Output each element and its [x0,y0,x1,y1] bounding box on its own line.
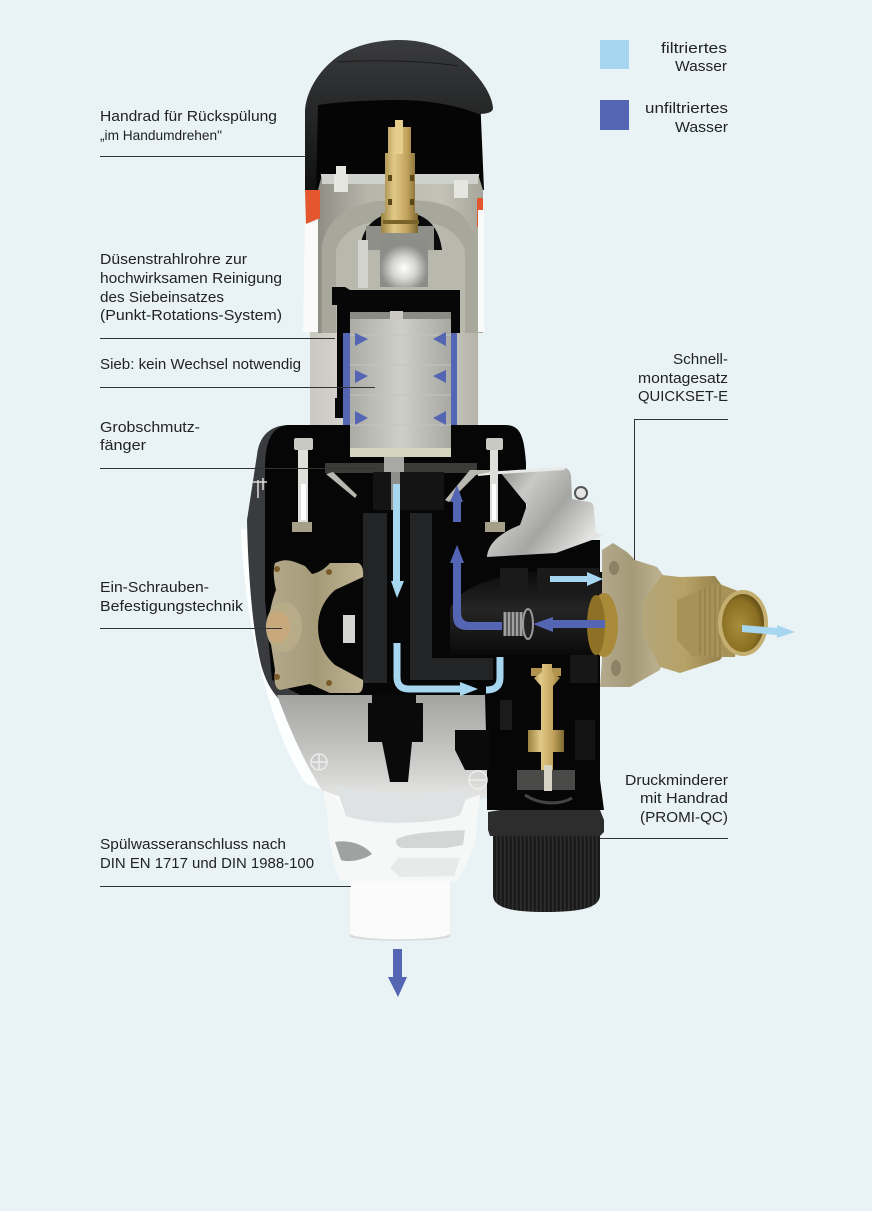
label: one-screw mounting: Ein-Schrauben- [100,579,209,596]
label: quick mounting set: montagesatz [638,370,728,387]
brass cartridge [381,120,419,233]
label: sieve: Sieb: kein Wechsel notwendig [100,356,301,373]
inner dark channels [363,513,604,760]
legend: filtered water label: Wasser [675,58,727,75]
label: quick mounting set: Schnell- [673,351,728,368]
filter device cutaway [241,40,795,997]
label: nozzle jet pipes [100,251,335,338]
pressure reducer nut [488,810,604,836]
unfiltered water flow arrows [450,485,605,632]
label: nozzle jet pipes: des Siebeinsatzes [100,289,224,306]
logo mark on shell [252,478,267,498]
left brass flange [266,560,363,693]
label: pressure reducer: Druckminderer [625,772,728,789]
pressure reducer knob [493,836,600,912]
label: flush water connection: DIN EN 1717 und DIN 1988-100 [100,855,314,872]
label: handwheel: Handrad für Rückspülung [100,108,277,125]
legend [600,40,728,136]
upper grey housing [318,174,483,333]
dome seam [338,61,458,66]
white side bands [303,210,484,332]
sieve insert [350,311,451,457]
orange side markers [305,190,483,227]
label: handwheel [100,108,305,156]
label: coarse dirt trap: fänger [100,437,146,454]
inner sieve collar [325,457,500,510]
legend: filtered water swatch [600,40,629,69]
legend: unfiltered water label [645,100,728,136]
legend: unfiltered water label: unfiltriertes [645,100,728,117]
grey lower chamber [277,695,490,800]
unfiltered water bars and inward arrows [343,332,457,425]
label: coarse dirt trap: Grobschmutz- [100,419,200,436]
label: pressure reducer: mit Handrad [640,790,728,807]
handwheel dome cap [305,40,493,190]
upper small screws [334,166,468,198]
lower brass pressure valve stem [517,664,575,803]
label: nozzle jet pipes: (Punkt-Rotations-System) [100,307,282,324]
black filter cage [332,287,460,418]
mounting screws [292,438,505,532]
label: flush water connection: Spülwasseranschluss nach [100,836,286,853]
white screw in chamber [311,754,327,770]
label: coarse dirt trap [100,419,377,468]
legend: filtered water label: filtriertes [661,40,727,57]
silver housing right [478,467,603,557]
label: quick mounting set [634,351,728,560]
filtered water flow arrows [391,484,795,696]
label: nozzle jet pipes: hochwirksamen Reinigung [100,270,282,287]
white screw near funnel [469,771,487,789]
label: pressure reducer: (PROMI-QC) [640,809,728,826]
label: one-screw mounting: Befestigungstechnik [100,598,244,615]
drain flow arrow [388,949,407,997]
label: one-screw mounting [100,579,282,628]
legend: unfiltered water swatch [600,100,629,130]
lower dark drain nozzle [368,695,423,782]
spring inside inlet [503,609,533,639]
silver centre cylinder [380,240,428,287]
label: flush water connection [100,836,351,886]
white outer shell [241,520,345,815]
handwheel black body [305,95,484,191]
label: handwheel: „im Handumdrehen" [100,127,222,143]
white funnel [323,785,480,941]
lower transparent tube [310,325,478,428]
main black body [265,425,604,810]
dark side shell [247,425,300,700]
label: quick mounting set: QUICKSET-E [638,388,728,405]
label: nozzle jet pipes: Düsenstrahlrohre zur [100,251,247,268]
legend: unfiltered water label: Wasser [675,119,728,136]
black valve mount block [455,730,490,770]
label: pressure reducer [600,772,728,838]
right brass connector [587,543,768,687]
legend: filtered water label [661,40,727,75]
